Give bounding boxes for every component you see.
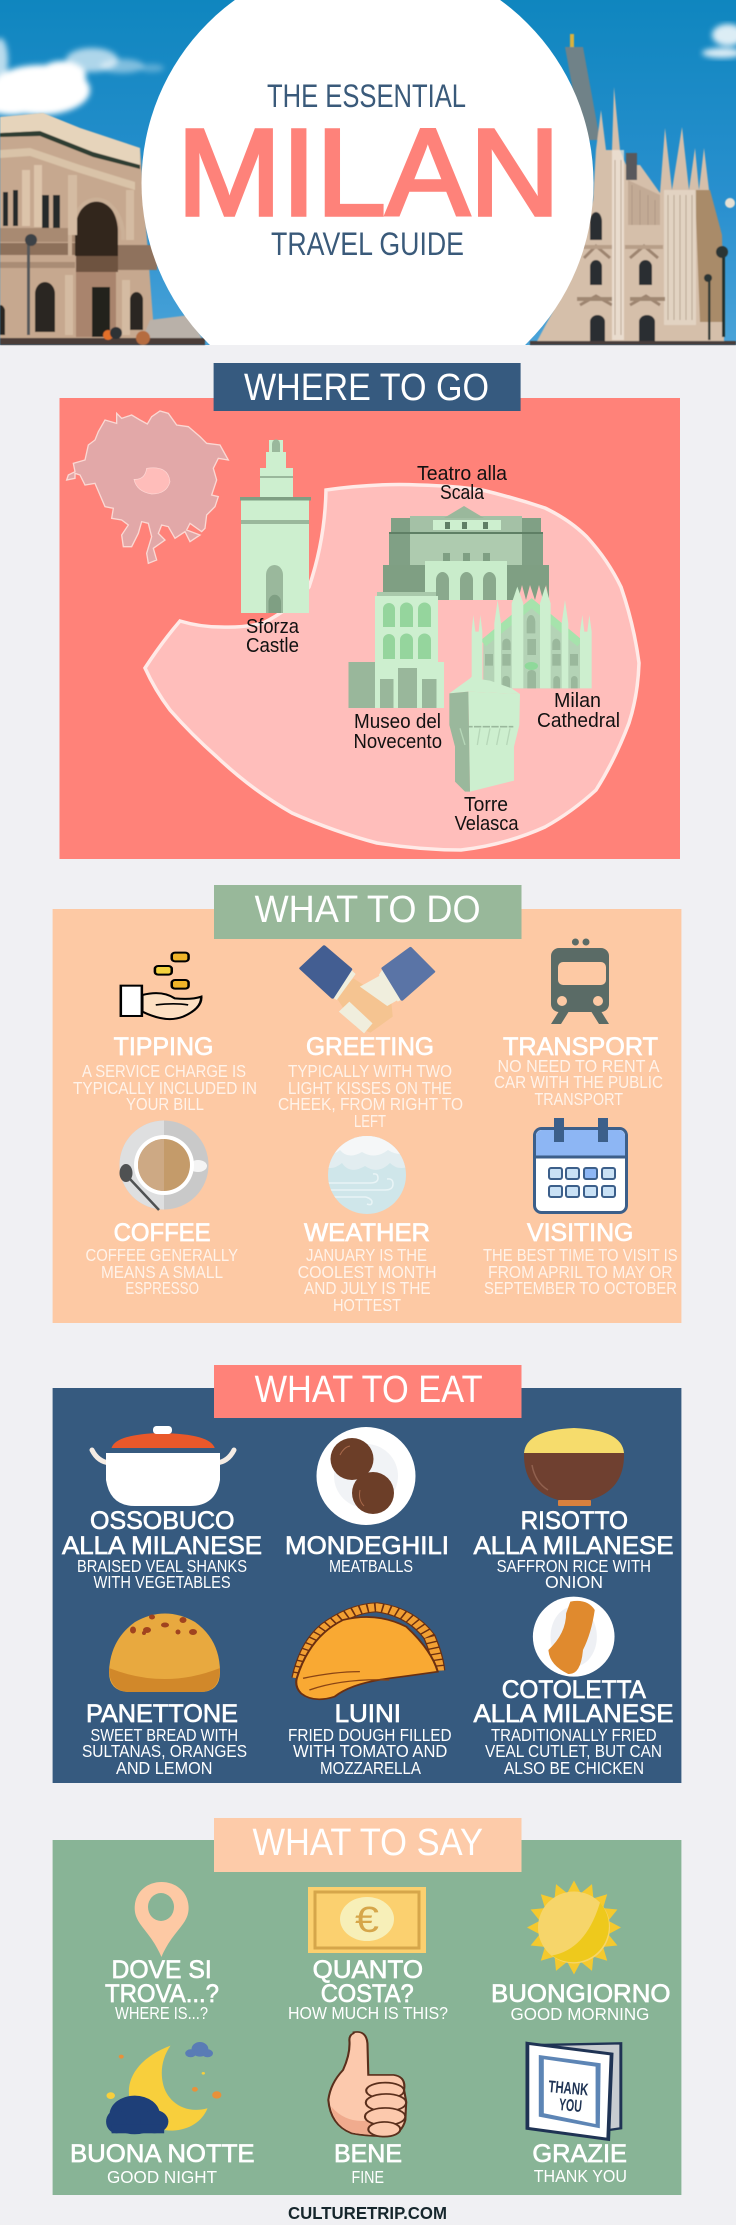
icon: weather wind: [328, 1136, 406, 1214]
text: transport: TRANSPORT: [534, 1089, 623, 1109]
icon: pot: [92, 1426, 234, 1506]
label: Teatro alla Scala: Teatro alla: [417, 463, 508, 485]
text: visiting: [483, 1219, 678, 1298]
text: greeting: GREETING: [306, 1033, 434, 1061]
icon: meatballs plate: [316, 1427, 416, 1525]
text: cotoletta: ALLA MILANESE: [474, 1700, 674, 1728]
footer credit: CULTURETRIP.COM: [288, 2203, 447, 2223]
label: Torre Velasca: Torre: [464, 794, 508, 816]
label: Torre Velasca: Velasca: [455, 813, 519, 835]
text: risotto: SAFFRON RICE WITH: [497, 1556, 651, 1576]
heading: what to say: [214, 1818, 522, 1872]
icon: moon and clouds: [106, 2042, 221, 2134]
text: weather: COOLEST MONTH: [298, 1262, 437, 1282]
text: cotoletta: VEAL CUTLET, BUT CAN: [485, 1741, 662, 1761]
panel: what to eat: [53, 1388, 681, 1783]
text: buongiorno: [491, 1980, 670, 2024]
city outline map: [67, 411, 228, 563]
clouds left: [0, 38, 164, 115]
text: risotto: RISOTTO: [521, 1507, 628, 1535]
text: dove si trova: [105, 1956, 219, 2023]
icon: thank you card: [527, 2043, 621, 2139]
text: buona notte: BUONA NOTTE: [70, 2140, 255, 2168]
panel: what to do: [53, 909, 681, 1323]
text: tipping: TYPICALLY INCLUDED IN: [73, 1078, 257, 1098]
photo: Galleria building: [0, 113, 205, 345]
text: weather: JANUARY IS THE: [306, 1245, 427, 1265]
text: tipping: YOUR BILL: [126, 1094, 204, 1114]
text: panettone: SWEET BREAD WITH: [90, 1725, 238, 1745]
text: grazie: [532, 2140, 627, 2186]
text: bene: BENE: [334, 2140, 402, 2168]
text: weather: AND JULY IS THE: [304, 1278, 431, 1298]
icon: euro banknote: [308, 1887, 426, 1953]
text: quanto costa: [288, 1956, 448, 2023]
text: tipping: A SERVICE CHARGE IS: [82, 1061, 246, 1081]
icon: sun: [527, 1880, 621, 1974]
text: weather: HOTTEST: [333, 1295, 401, 1315]
text: weather: [298, 1219, 437, 1315]
icon: tipping hand: [121, 953, 201, 1019]
text: quanto costa: QUANTO: [313, 1956, 423, 1984]
text: mondeghili: MEATBALLS: [329, 1556, 413, 1576]
hero title circle: [142, 0, 594, 345]
heading: what to say: WHAT TO SAY: [252, 1822, 483, 1864]
icon: thank you card: YOU: [558, 2095, 583, 2116]
label: Teatro alla Scala: Scala: [440, 482, 485, 504]
label: Teatro alla Scala: [417, 463, 508, 504]
label: Sforza Castle: Castle: [246, 635, 299, 657]
icon: panettone: [109, 1614, 220, 1692]
building: Torre Velasca: [449, 675, 520, 792]
icon: thumbs up: [328, 2032, 406, 2137]
title: travel guide: TRAVEL GUIDE: [271, 226, 464, 262]
central district shape: [145, 485, 639, 850]
icon: coffee cup: [120, 1120, 208, 1210]
label: Milan Cathedral: Milan: [554, 690, 601, 712]
building: Teatro alla Scala: [383, 506, 549, 600]
text: ossobuco: OSSOBUCO: [90, 1507, 234, 1535]
text: transport: CAR WITH THE PUBLIC: [494, 1072, 663, 1092]
text: panettone: AND LEMON: [116, 1758, 212, 1778]
icon: luini pastry: [296, 1607, 439, 1699]
text: visiting: SEPTEMBER TO OCTOBER: [484, 1278, 677, 1298]
label: Museo del Novecento: Museo del: [354, 711, 441, 733]
heading: what to do: [214, 885, 522, 939]
title: Milan: MILAN: [177, 105, 560, 242]
text: coffee: ESPRESSO: [125, 1278, 199, 1298]
text: luini: MOZZARELLA: [320, 1758, 421, 1778]
icon: handshake: [301, 947, 434, 1033]
label: Sforza Castle: Sforza: [246, 616, 300, 638]
text: greeting: [278, 1033, 463, 1131]
label: Museo del Novecento: [354, 711, 442, 753]
text: cotoletta: ALSO BE CHICKEN: [504, 1758, 644, 1778]
text: cotoletta: COTOLETTA: [502, 1676, 646, 1704]
icon: location pin: [135, 1882, 189, 1957]
icon: risotto bowl: [524, 1428, 624, 1506]
building: Museo del Novecento: [348, 592, 444, 708]
text: panettone: [82, 1700, 247, 1778]
text: mondeghili: MONDEGHILI: [285, 1532, 449, 1560]
clouds right: [702, 24, 736, 58]
text: luini: [288, 1700, 452, 1778]
text: risotto: ALLA MILANESE: [474, 1532, 674, 1560]
text: panettone: SULTANAS, ORANGES: [82, 1741, 247, 1761]
text: luini: FRIED DOUGH FILLED: [288, 1725, 452, 1745]
text: quanto costa: COSTA?: [321, 1980, 414, 2008]
text: cotoletta: [474, 1676, 674, 1778]
text: cotoletta: TRADITIONALLY FRIED: [491, 1725, 657, 1745]
heading: what to do: WHAT TO DO: [255, 889, 481, 931]
text: transport: [494, 1033, 663, 1109]
text: coffee: COFFEE: [114, 1219, 211, 1247]
label: Museo del Novecento: Novecento: [354, 731, 442, 753]
text: luini: WITH TOMATO AND: [293, 1741, 447, 1761]
hero photo banner: [0, 0, 736, 345]
text: dove si trova: TROVA...?: [105, 1980, 219, 2008]
text: grazie: GRAZIE: [532, 2140, 627, 2168]
text: transport: TRANSPORT: [503, 1033, 658, 1061]
text: weather: WEATHER: [304, 1219, 430, 1247]
text: grazie: THANK YOU: [534, 2166, 627, 2186]
text: visiting: FROM APRIL TO MAY OR: [488, 1262, 673, 1282]
text: greeting: LEFT: [354, 1111, 386, 1131]
title: the essential: THE ESSENTIAL: [267, 78, 466, 114]
panel: where to go: [60, 398, 680, 859]
text: dove si trova: DOVE SI: [112, 1956, 212, 1984]
building: Milan Cathedral: [472, 587, 592, 688]
text: visiting: THE BEST TIME TO VISIT IS: [483, 1245, 678, 1265]
text: dove si trova: WHERE IS...?: [115, 2003, 208, 2023]
text: ossobuco: ALLA MILANESE: [62, 1532, 262, 1560]
photo: Milan Cathedral: [530, 34, 736, 345]
text: buona notte: [70, 2140, 255, 2187]
text: ossobuco: WITH VEGETABLES: [94, 1572, 231, 1592]
panel: what to say: [53, 1840, 681, 2195]
label: Milan Cathedral: [537, 690, 620, 732]
text: ossobuco: [62, 1507, 262, 1592]
text: buongiorno: GOOD MORNING: [510, 2004, 649, 2024]
icon: calendar: [534, 1118, 626, 1212]
text: buongiorno: BUONGIORNO: [491, 1980, 670, 2008]
text: risotto: ONION: [545, 1572, 603, 1592]
text: mondeghili: [285, 1532, 449, 1576]
label: Torre Velasca: [455, 794, 519, 835]
building: Sforza Castle: [240, 439, 311, 613]
icon: train: [551, 938, 609, 1024]
text: visiting: VISITING: [527, 1219, 633, 1247]
icon: euro banknote: €: [355, 1899, 379, 1940]
text: greeting: LIGHT KISSES ON THE: [288, 1078, 452, 1098]
text: coffee: [86, 1219, 238, 1298]
text: panettone: PANETTONE: [86, 1700, 238, 1728]
icon: cotoletta plate: [533, 1597, 615, 1677]
label: Milan Cathedral: Cathedral: [537, 710, 620, 732]
heading: where to go: WHERE TO GO: [244, 367, 489, 409]
icon: thank you card: THANK: [548, 2077, 590, 2100]
text: coffee: COFFEE GENERALLY: [86, 1245, 238, 1265]
text: risotto: [474, 1507, 674, 1592]
text: coffee: MEANS A SMALL: [101, 1262, 223, 1282]
heading: what to eat: WHAT TO EAT: [255, 1369, 483, 1411]
text: tipping: TIPPING: [114, 1033, 213, 1061]
text: tipping: [73, 1033, 257, 1114]
text: luini: LUINI: [335, 1700, 401, 1728]
text: ossobuco: BRAISED VEAL SHANKS: [77, 1556, 247, 1576]
text: buona notte: GOOD NIGHT: [107, 2167, 217, 2187]
text: greeting: CHEEK, FROM RIGHT TO: [278, 1094, 463, 1114]
text: greeting: TYPICALLY WITH TWO: [288, 1061, 452, 1081]
text: quanto costa: HOW MUCH IS THIS?: [288, 2003, 448, 2023]
heading: what to eat: [214, 1365, 522, 1418]
label: Sforza Castle: [246, 616, 300, 657]
text: transport: NO NEED TO RENT A: [498, 1056, 660, 1076]
text: bene: [334, 2140, 402, 2187]
text: bene: FINE: [352, 2167, 384, 2187]
